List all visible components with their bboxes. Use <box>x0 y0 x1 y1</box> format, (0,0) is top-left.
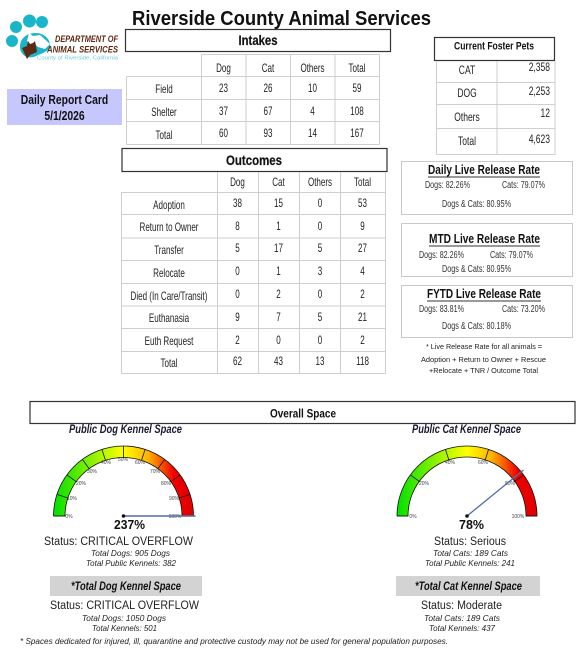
status text <box>44 536 193 568</box>
foster table: 2,358 <box>529 62 550 74</box>
gauge: dog kennels 237%: 80% <box>161 481 172 487</box>
intakes table: 167 <box>350 128 364 140</box>
heading: foster pets: Current Foster Pets <box>454 40 534 52</box>
gauge: cat kennels 78%: 20% <box>419 481 430 487</box>
status text <box>425 536 515 568</box>
heading: overall space: Overall Space <box>270 408 336 420</box>
panel: total dog kennel space: Total Kennels: 501 <box>92 623 157 633</box>
gauge: cat kennels 78%: 0% <box>409 514 417 520</box>
panel: outcomes <box>122 148 387 374</box>
gauge: cat kennels 78%: 60% <box>478 460 489 466</box>
intakes table: 37 <box>219 106 228 118</box>
panel: FYTD live release rate: Dogs: 83.81% <box>419 304 464 315</box>
outcomes table: 53 <box>358 198 367 210</box>
status text: Status: Serious <box>434 536 506 548</box>
panel: total dog kennel space <box>50 576 202 633</box>
gauge: dog kennels 237%: 100% <box>169 514 182 520</box>
outcomes table: 8 <box>235 221 240 233</box>
foster table: 4,623 <box>529 134 550 146</box>
panel: intakes <box>126 30 390 144</box>
daily report card: Daily Report Card <box>21 94 108 107</box>
panel: MTD live release rate: MTD Live Release Rate <box>429 232 540 246</box>
gauge: dog kennels 237%: 60% <box>135 460 146 466</box>
outcomes table: 27 <box>358 243 367 255</box>
status text: Total Cats: 189 Cats <box>433 548 509 558</box>
panel: current foster pets <box>434 38 555 154</box>
logo: Department of Animal Services <box>6 14 119 62</box>
panel: total cat kennel space: *Total Cat Kennel Space <box>415 579 522 593</box>
intakes table: Total <box>156 130 172 142</box>
outcomes table: 15 <box>274 198 283 210</box>
gauge: cat kennels 78%: 40% <box>445 460 456 466</box>
panel: MTD live release rate: Dogs & Cats: 80.95% <box>442 264 511 275</box>
panel: FYTD live release rate: Dogs & Cats: 80.18% <box>442 321 511 332</box>
heading: Public Dog Kennel Space <box>69 424 182 436</box>
intakes table: 60 <box>219 128 228 140</box>
outcomes table: 62 <box>233 356 242 368</box>
outcomes table: 9 <box>360 221 365 233</box>
foster table: Total <box>458 136 476 148</box>
outcomes table: Euth Request <box>145 336 194 348</box>
gauge: dog kennels 237%: 50% <box>118 457 129 463</box>
panel: daily live release rate: Cats: 79.07% <box>502 180 545 191</box>
gauge: dog kennels 237%: 70% <box>150 469 161 475</box>
outcomes table: 1 <box>276 221 281 233</box>
outcomes table: 0 <box>318 198 323 210</box>
panel: daily live release rate: Dogs: 82.26% <box>425 180 470 191</box>
daily report card <box>7 89 122 125</box>
gauge: dog kennels 237%: 30% <box>87 469 98 475</box>
panel: MTD live release rate <box>402 224 572 276</box>
intakes table: Field <box>155 84 173 96</box>
outcomes table: 13 <box>316 356 325 368</box>
outcomes table: 4 <box>360 266 365 278</box>
panel: FYTD live release rate: FYTD Live Release Rate <box>427 287 541 301</box>
gauge: dog kennels 237%: 20% <box>76 481 87 487</box>
outcomes table: Return to Owner <box>140 222 199 234</box>
gauge: dog kennels 237%: 40% <box>101 460 112 466</box>
intakes table: 4 <box>310 106 315 118</box>
heading: intakes: Intakes <box>238 33 278 48</box>
gauge: dog kennels 237% <box>54 446 196 520</box>
gauge: dog kennels 237%: 90% <box>169 496 180 502</box>
foster table <box>436 61 555 154</box>
panel: daily live release rate: Daily Live Release Rate <box>428 163 540 177</box>
heading: overall space <box>30 402 575 424</box>
panel: MTD live release rate: Dogs: 82.26% <box>419 250 464 261</box>
outcomes table: 17 <box>274 243 283 255</box>
panel: total dog kennel space: Status: CRITICAL OVERFLOW <box>50 600 199 612</box>
title: Riverside County Animal Services <box>132 8 431 30</box>
logo text <box>37 34 119 62</box>
intakes table: Total <box>349 63 365 75</box>
heading: outcomes <box>122 148 387 172</box>
status text: Total Public Kennels: 382 <box>86 558 176 568</box>
outcomes table: 0 <box>235 289 240 301</box>
outcomes table: 0 <box>235 266 240 278</box>
panel: FYTD live release rate: Cats: 73.20% <box>502 304 545 315</box>
outcomes table: Transfer <box>154 245 184 257</box>
outcomes table: 0 <box>318 221 323 233</box>
heading: Public Cat Kennel Space <box>412 424 521 436</box>
intakes table: 14 <box>308 128 317 140</box>
intakes table: Shelter <box>151 107 177 119</box>
outcomes table: 0 <box>318 335 323 347</box>
gauge: cat kennels 78%: 100% <box>512 514 525 520</box>
panel: daily live release rate <box>402 162 572 214</box>
logo text: ANIMAL SERVICES <box>46 44 119 56</box>
gauge: dog kennels 237%: 0% <box>65 514 73 520</box>
panel: total dog kennel space: *Total Dog Kennel Space <box>71 579 181 593</box>
panel: public cat kennel space <box>397 424 537 568</box>
panel: total cat kennel space: Total Kennels: 437 <box>429 623 495 633</box>
gauge: cat kennels 78% <box>397 446 537 520</box>
outcomes table: 5 <box>235 243 240 255</box>
outcomes table: 0 <box>318 289 323 301</box>
intakes table <box>126 54 380 144</box>
daily report card: 5/1/2026 <box>44 110 85 123</box>
gauge: dog kennels 237%: 10% <box>67 496 78 502</box>
intakes table: Others <box>300 63 325 75</box>
live release rate note: * Live Release Rate for all animals = <box>426 342 543 351</box>
outcomes table: 38 <box>233 198 242 210</box>
panel: MTD live release rate: Cats: 79.07% <box>490 250 533 261</box>
live release rate note: Adoption + Return to Owner + Rescue <box>421 355 546 364</box>
outcomes table: Others <box>308 177 332 189</box>
outcomes table: Cat <box>272 177 285 189</box>
outcomes table: Adoption <box>153 200 185 212</box>
outcomes table: 2 <box>360 289 365 301</box>
foster table: Others <box>454 112 480 124</box>
outcomes table: Dog <box>230 177 245 189</box>
foster table: DOG <box>457 88 477 100</box>
status text: Status: CRITICAL OVERFLOW <box>44 536 193 548</box>
outcomes table: 2 <box>360 335 365 347</box>
outcomes table: 1 <box>276 266 281 278</box>
panel: total cat kennel space <box>396 576 540 633</box>
live release rate note: +Relocate + TNR / Outcome Total <box>429 366 538 375</box>
foster table: 2,253 <box>529 86 550 98</box>
intakes table: 93 <box>264 128 273 140</box>
logo text: DEPARTMENT OF <box>55 34 118 45</box>
panel: daily live release rate: Dogs & Cats: 80.95% <box>442 199 511 210</box>
outcomes table <box>122 172 386 374</box>
status text: Total Dogs: 905 Dogs <box>91 548 171 558</box>
status text: Total Public Kennels: 241 <box>425 558 515 568</box>
outcomes table: Total <box>161 358 177 370</box>
intakes table: 10 <box>308 83 317 95</box>
outcomes table: 2 <box>276 289 281 301</box>
gauge value: 237% <box>114 517 145 532</box>
foster table: CAT <box>459 65 475 77</box>
outcomes table: 2 <box>235 335 240 347</box>
heading: intakes <box>126 30 390 52</box>
outcomes table: Total <box>354 177 371 189</box>
foster table: 12 <box>541 108 550 120</box>
outcomes table: 5 <box>318 243 323 255</box>
outcomes table: 0 <box>276 335 281 347</box>
panel: total cat kennel space: Total Cats: 189 Cats <box>424 613 501 623</box>
outcomes table: 7 <box>276 312 281 324</box>
panel: total cat kennel space: Status: Moderate <box>421 600 502 612</box>
intakes table: 67 <box>264 106 273 118</box>
panel: public dog kennel space <box>44 424 196 568</box>
intakes table: 26 <box>264 83 273 95</box>
live release rate note <box>421 342 546 375</box>
panel: FYTD live release rate <box>402 286 572 338</box>
icon: paw with dog and cat <box>6 14 50 59</box>
panel: total dog kennel space: Total Dogs: 1050 Dogs <box>82 613 167 623</box>
intakes table: 23 <box>219 83 228 95</box>
footnote: * Spaces dedicated for injured, ill, quarantine and protective custody may not be used for general population purposes. <box>20 637 448 646</box>
outcomes table: 43 <box>274 356 283 368</box>
heading: outcomes: Outcomes <box>226 153 282 168</box>
intakes table: 108 <box>350 106 364 118</box>
intakes table: Cat <box>262 63 274 75</box>
intakes table: Dog <box>216 63 231 75</box>
outcomes table: 118 <box>356 356 369 368</box>
logo text: County of Riverside, California <box>37 56 119 62</box>
outcomes table: 5 <box>318 312 323 324</box>
gauge: cat kennels 78%: 80% <box>505 481 516 487</box>
gauge value: 78% <box>459 517 484 532</box>
outcomes table: Euthanasia <box>149 313 189 325</box>
outcomes table: 21 <box>358 312 367 324</box>
outcomes table: 3 <box>318 266 323 278</box>
intakes table: 59 <box>353 83 362 95</box>
outcomes table: Died (In Care/Transit) <box>131 291 207 303</box>
outcomes table: 9 <box>235 312 240 324</box>
outcomes table: Relocate <box>153 268 185 280</box>
